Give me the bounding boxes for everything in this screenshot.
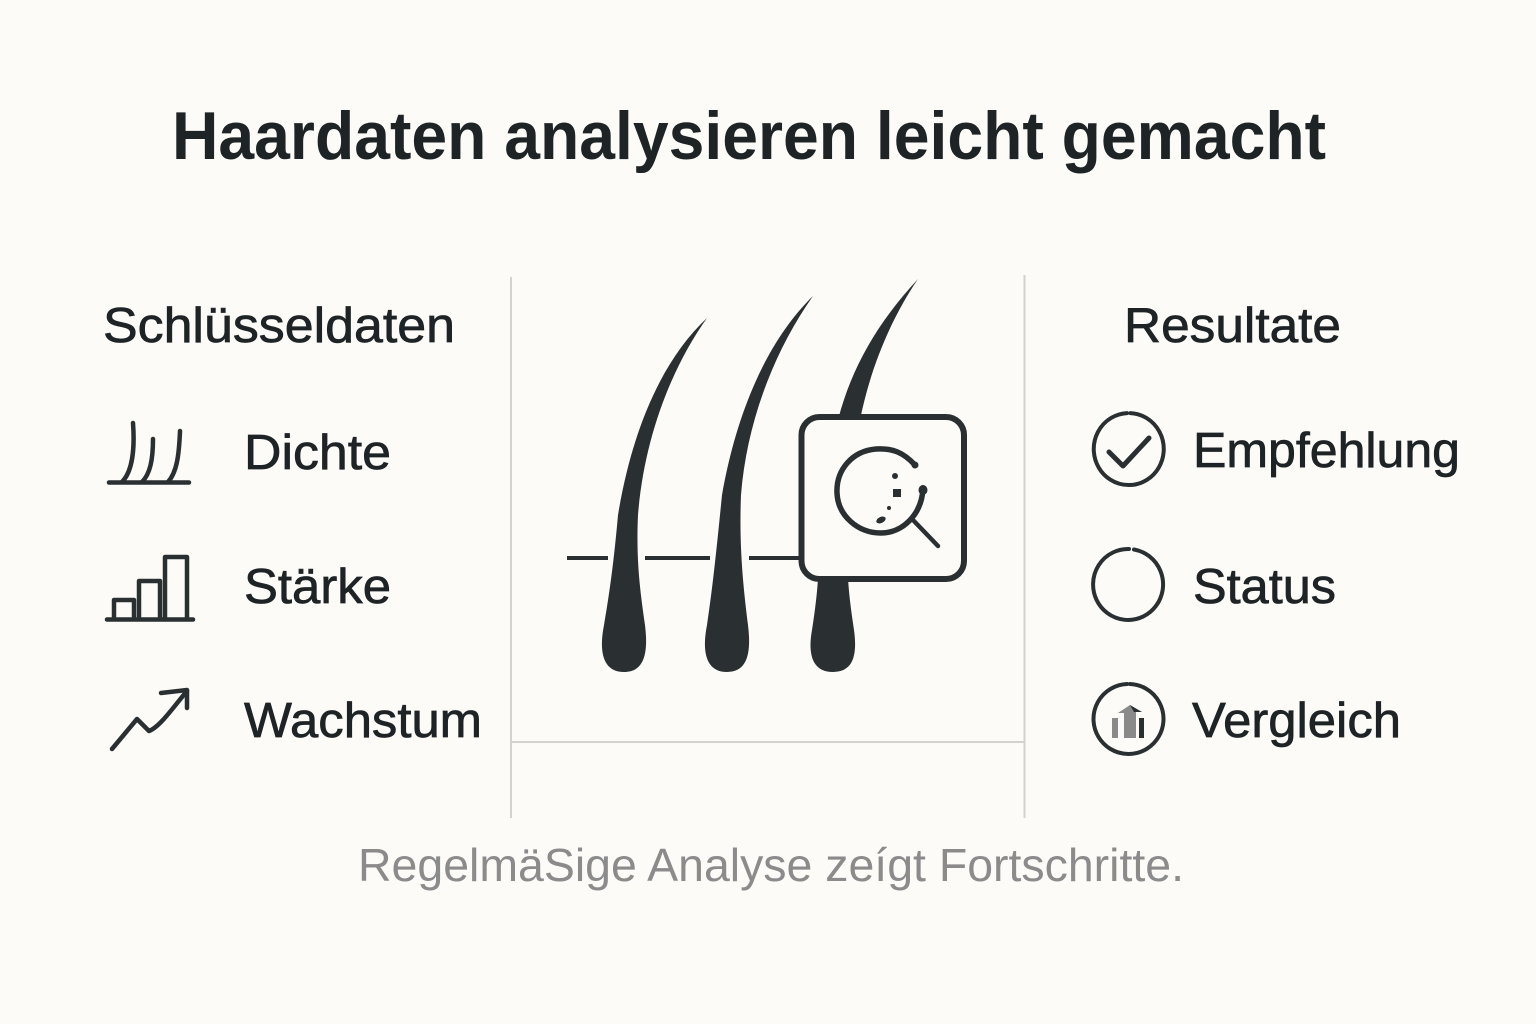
hair illustration [567, 279, 964, 672]
label: Status: Status [1193, 560, 1336, 614]
skin line [567, 556, 800, 560]
label: Dichte: Dichte [244, 426, 391, 480]
panel: Resultate [1093, 299, 1460, 754]
heading: Resultate: Resultate [1124, 299, 1341, 353]
icon: strength bars [107, 557, 193, 620]
hair 3 root [810, 578, 855, 672]
label: Empfehlung: Empfehlung [1193, 424, 1460, 478]
hair 2 [705, 296, 813, 672]
icon: density hairs [109, 423, 189, 482]
icon: check circle [1094, 413, 1164, 485]
icon: status circle [1093, 549, 1163, 620]
label: Wachstum: Wachstum [244, 694, 482, 748]
icon: magnifier [837, 449, 938, 546]
icon: growth arrow [112, 690, 187, 749]
footer note: RegelmäSige Analyse zeígt Fortschritte. [358, 839, 1184, 891]
heading: Schlüsseldaten: Schlüsseldaten [103, 299, 455, 353]
label: Stärke: Stärke [244, 560, 391, 614]
title: Haardaten analysieren leicht gemacht [172, 98, 1326, 174]
panel: Schlüsseldaten [103, 299, 482, 749]
label: Vergleich: Vergleich [1192, 694, 1401, 748]
hair 1 [602, 318, 707, 672]
panel frame lines [511, 275, 1024, 818]
icon: comparison circle [1094, 684, 1164, 754]
hair 3 [838, 279, 918, 420]
magnifier box [802, 417, 964, 579]
